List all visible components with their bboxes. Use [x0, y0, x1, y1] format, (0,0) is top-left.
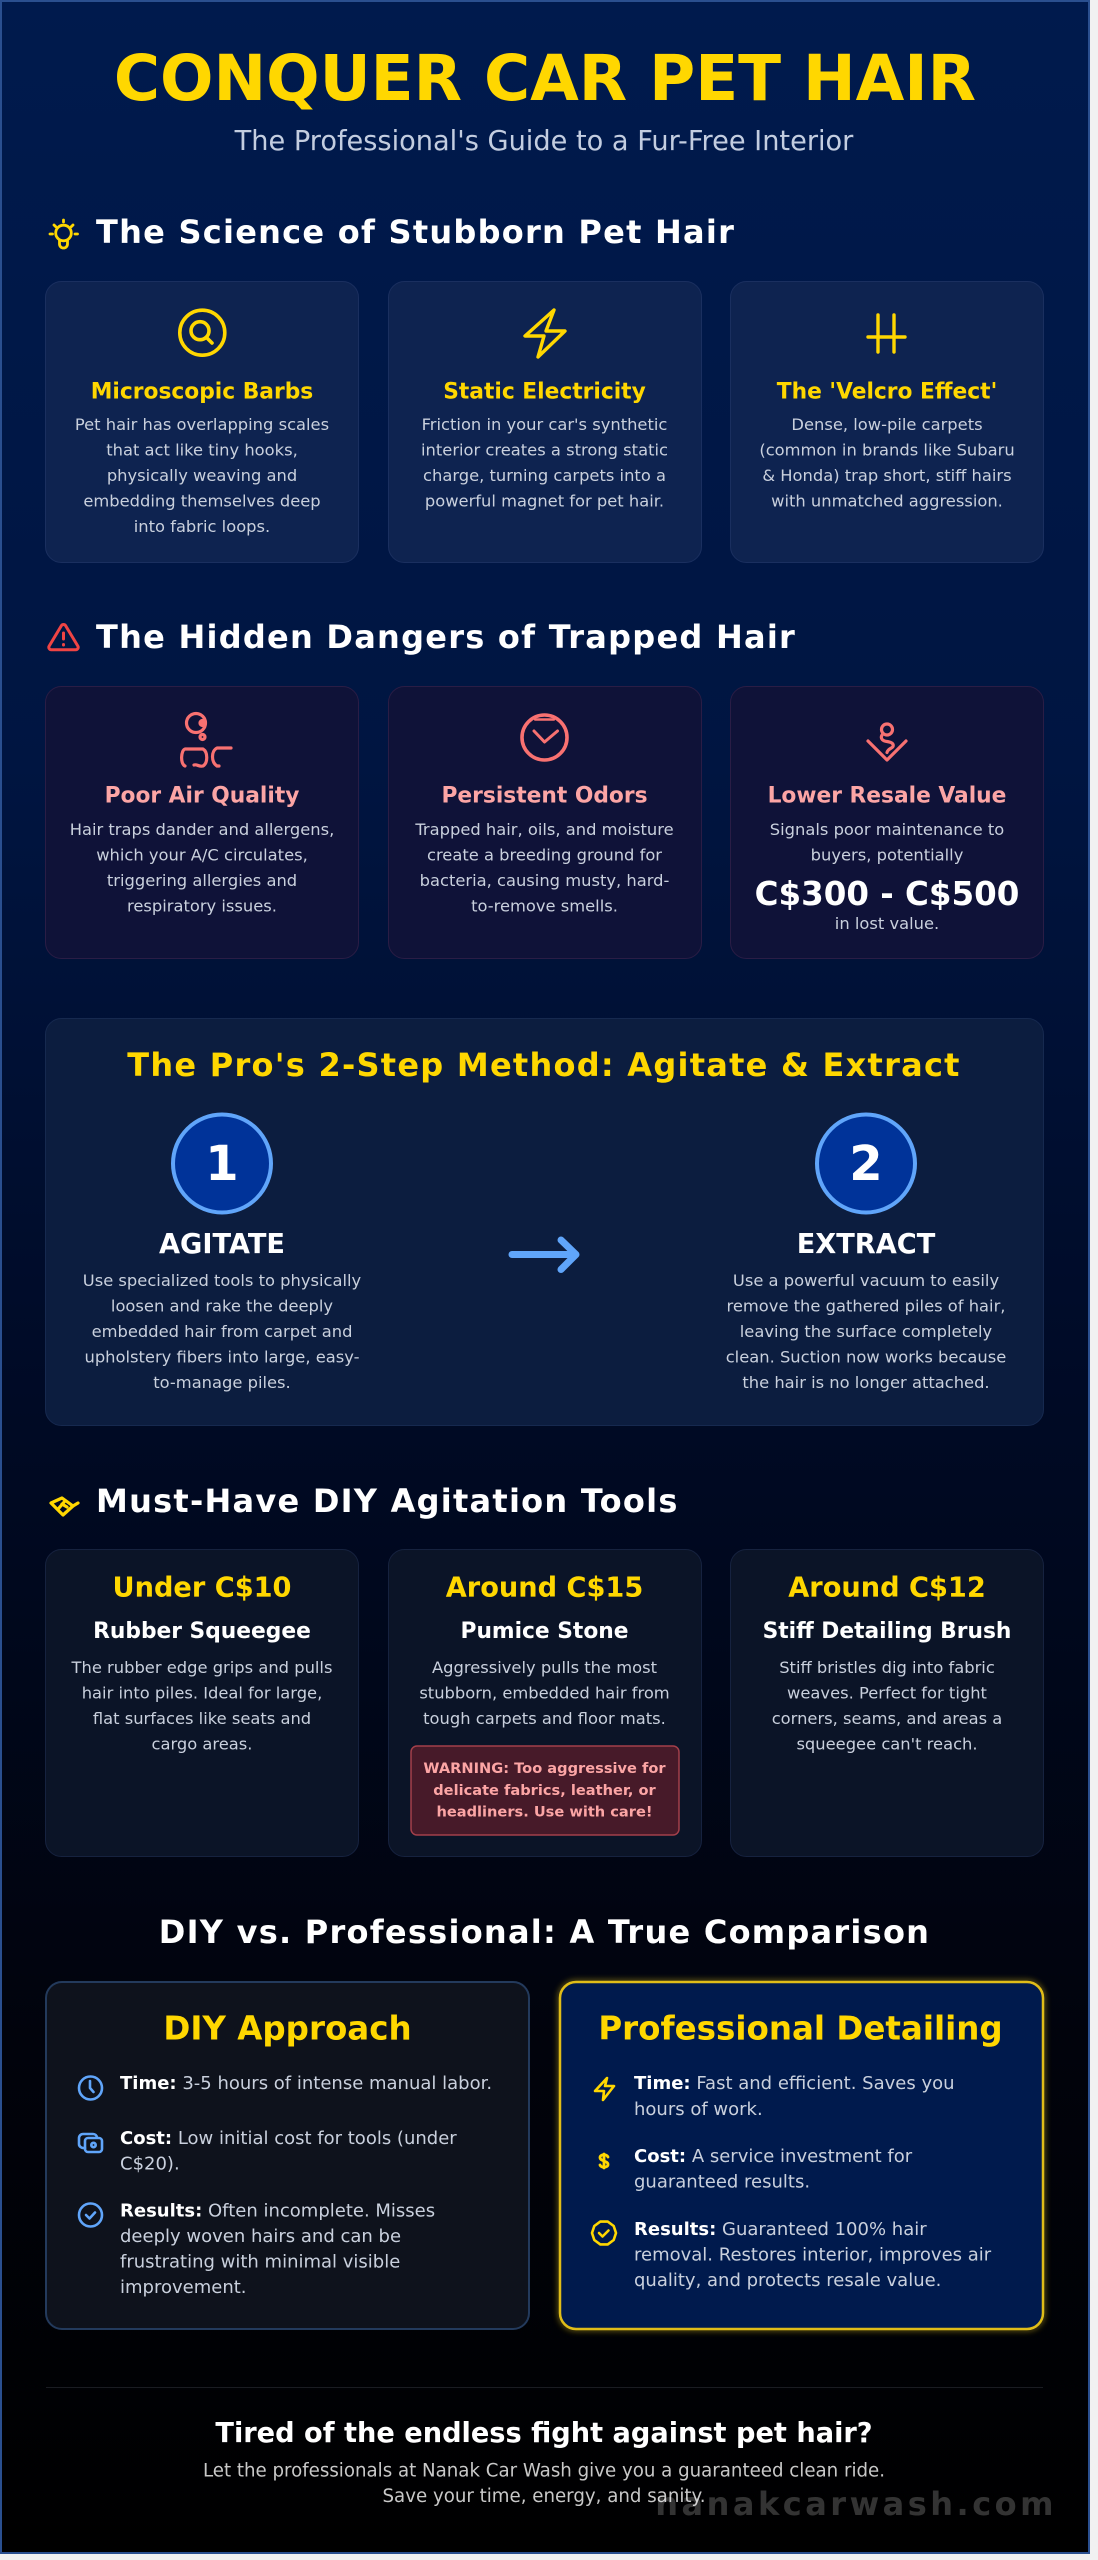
number circle [173, 1114, 271, 1212]
card: stiff detailing brush: squeegee can't reach. [796, 1734, 978, 1754]
card: poor air quality: triggering allergies and [107, 871, 297, 890]
card: microscopic barbs: Pet hair has overlapping scales [75, 415, 329, 434]
card: lower resale value: Signals poor maintenance to [770, 820, 1004, 839]
arrow [512, 1240, 576, 1270]
icon: value drop [868, 724, 906, 760]
step 2: clean. Suction now works because [726, 1348, 1006, 1366]
card: rubber squeegee [46, 1550, 358, 1856]
card: rubber squeegee: Rubber Squeegee [93, 1619, 311, 1644]
card: microscopic barbs [46, 282, 358, 562]
icon: odor [522, 715, 567, 760]
card: lower resale value: C$300 - C$500 [755, 875, 1019, 913]
section heading: dangers: The Hidden Dangers of Trapped Hair [96, 618, 796, 656]
icon: dollar [600, 2154, 608, 2168]
card: lower resale value [730, 686, 1044, 958]
footer heading: Tired of the endless fight against pet hair? [215, 2418, 873, 2449]
panel: danger cards [46, 686, 1044, 958]
step 1: to-manage piles. [153, 1373, 291, 1392]
panel: science cards [46, 282, 1044, 562]
card: pumice stone: Pumice Stone [460, 1619, 628, 1644]
card: velcro effect: Dense, low-pile carpets [791, 415, 983, 434]
card: persistent odors: create a breeding ground for [427, 846, 662, 864]
panel: 2-step method [46, 1018, 1044, 1426]
card: rubber squeegee: Under C$10 [113, 1572, 291, 1604]
card: persistent odors: Persistent Odors [441, 784, 648, 808]
panel: professional detailing: Time: Fast and efficient. Saves you [634, 2073, 955, 2094]
card: poor air quality: Hair traps dander and allergens, [70, 820, 334, 839]
card: static electricity [388, 282, 702, 562]
step 1: upholstery fibers into large, easy- [84, 1348, 360, 1366]
panel: DIY approach: frustrating with minimal visible [120, 2252, 400, 2272]
subtitle: The Professional's Guide to a Fur-Free Interior [234, 126, 854, 157]
card: velcro effect: & Honda) trap short, stiff hairs [762, 466, 1012, 485]
card: persistent odors: to-remove smells. [471, 896, 618, 916]
step 2: leaving the surface completely [740, 1322, 993, 1341]
card: microscopic barbs: embedding themselves deep [83, 492, 321, 510]
card: stiff detailing brush: Stiff Detailing Brush [763, 1619, 1011, 1644]
card: poor air quality: Poor Air Quality [105, 784, 299, 808]
card: pumice stone: Aggressively pulls the most [432, 1658, 657, 1677]
icon: air quality [182, 714, 231, 766]
card: poor air quality [46, 686, 358, 958]
card: microscopic barbs: that act like tiny hooks, [106, 440, 298, 460]
step 2: EXTRACT [797, 1229, 936, 1260]
panel: professional detailing: Professional Detailing [598, 2010, 1003, 2048]
card: stiff detailing brush: weaves. Perfect for tight [787, 1684, 987, 1702]
card: rubber squeegee: The rubber edge grips and pulls [71, 1658, 332, 1677]
card: persistent odors: bacteria, causing musty, hard- [420, 871, 669, 890]
card: persistent odors: Trapped hair, oils, and moisture [414, 820, 674, 839]
panel: DIY approach: C$20). [120, 2154, 180, 2174]
card: velcro effect: (common in brands like Subaru [759, 440, 1015, 460]
number circle: 2 [849, 1136, 883, 1192]
icon: tool [51, 1498, 78, 1515]
card: microscopic barbs: into fabric loops. [134, 517, 270, 536]
icon: lightning bolt [525, 310, 565, 357]
panel: DIY approach: deeply woven hairs and can be [120, 2226, 401, 2247]
panel: DIY approach: Cost: Low initial cost for tools (under [120, 2128, 457, 2149]
icon: bolt [595, 2078, 614, 2100]
card: static electricity: Static Electricity [443, 380, 646, 404]
warning callout: headliners. Use with care! [436, 1804, 653, 1820]
card: rubber squeegee: flat surfaces like seats and [93, 1709, 311, 1728]
card: static electricity: interior creates a strong static [421, 440, 668, 460]
card: lower resale value: buyers, potentially [811, 846, 964, 864]
icon: badge check [592, 2222, 616, 2244]
icon: clock [79, 2076, 102, 2100]
section heading: tools: Must-Have DIY Agitation Tools [96, 1482, 679, 1520]
panel: professional detailing [560, 1982, 1043, 2329]
watermark: nanakcarwash.com [655, 2485, 1057, 2523]
icon: magnifier [180, 310, 225, 355]
step 1: loosen and rake the deeply [111, 1296, 333, 1316]
panel: professional detailing: quality, and protects resale value. [634, 2270, 941, 2291]
step 2: the hair is no longer attached. [742, 1373, 990, 1392]
panel: DIY approach: DIY Approach [163, 2010, 412, 2048]
panel: professional detailing: removal. Restores interior, improves air [634, 2244, 992, 2266]
panel: DIY approach: improvement. [120, 2277, 247, 2298]
warning callout: delicate fabrics, leather, or [433, 1782, 657, 1799]
card: stiff detailing brush: Stiff bristles dig into fabric [779, 1658, 995, 1677]
footer text: Save your time, energy, and sanity. [383, 2486, 705, 2507]
card: poor air quality: respiratory issues. [127, 896, 277, 916]
card: microscopic barbs: physically weaving and [107, 466, 297, 485]
warning callout: WARNING: Too aggressive for [423, 1760, 666, 1777]
footer text [203, 2460, 885, 2507]
card: static electricity: charge, turning carpets into a [423, 466, 666, 485]
number circle: 1 [205, 1136, 239, 1192]
panel: professional detailing: guaranteed results. [634, 2172, 810, 2192]
step 2: Use a powerful vacuum to easily [733, 1271, 999, 1290]
panel: professional detailing: Results: Guaranteed 100% hair [634, 2219, 927, 2240]
step 1: embedded hair from carpet and [92, 1322, 352, 1341]
warning callout [411, 1746, 679, 1835]
panel: tool cards [46, 1550, 1044, 1856]
icon: light bulb [50, 220, 78, 248]
footer text: Let the professionals at Nanak Car Wash give you a guaranteed clean ride. [203, 2460, 885, 2482]
card: lower resale value: Lower Resale Value [768, 784, 1006, 808]
card: lower resale value: in lost value. [835, 914, 939, 933]
card: velcro effect [730, 282, 1044, 562]
icon: velcro hash [868, 315, 905, 352]
title: CONQUER CAR PET HAIR [114, 42, 976, 115]
step 1 [83, 1114, 362, 1392]
card: rubber squeegee: hair into piles. Ideal for large, [82, 1684, 322, 1702]
heading: The Pro's 2-Step Method: Agitate & Extract [127, 1046, 961, 1084]
step 1: AGITATE [159, 1229, 285, 1260]
comparison heading: DIY vs. Professional: A True Comparison [159, 1913, 930, 1951]
panel: professional detailing: hours of work. [634, 2099, 763, 2120]
panel: DIY approach [46, 1982, 529, 2329]
icon: check circle [79, 2204, 102, 2226]
card: pumice stone: stubborn, embedded hair from [419, 1684, 670, 1702]
card: microscopic barbs: Microscopic Barbs [91, 380, 313, 404]
icon: cash [79, 2134, 102, 2152]
step 2: remove the gathered piles of hair, [727, 1296, 1005, 1316]
card: pumice stone: Around C$15 [446, 1572, 643, 1604]
section heading: science: The Science of Stubborn Pet Hair [96, 213, 735, 251]
card: pumice stone [388, 1550, 702, 1856]
card: velcro effect: with unmatched aggression. [771, 492, 1003, 510]
card: stiff detailing brush: corners, seams, and areas a [772, 1709, 1002, 1728]
icon: warning triangle [49, 624, 78, 650]
panel: DIY approach: Time: 3-5 hours of intense manual labor. [120, 2073, 492, 2094]
card: poor air quality: which your A/C circulates, [96, 846, 308, 864]
card: velcro effect: The 'Velcro Effect' [777, 380, 997, 404]
number circle [817, 1114, 915, 1212]
card: pumice stone: tough carpets and floor mats. [423, 1709, 666, 1728]
card: persistent odors [388, 686, 702, 958]
panel: professional detailing: Cost: A service investment for [634, 2146, 913, 2167]
card: rubber squeegee: cargo areas. [152, 1734, 252, 1754]
card: stiff detailing brush: Around C$12 [788, 1572, 986, 1604]
card: stiff detailing brush [730, 1550, 1044, 1856]
card: static electricity: Friction in your car's synthetic [422, 415, 667, 434]
panel: DIY approach: Results: Often incomplete. Misses [120, 2200, 435, 2222]
step 2 [726, 1114, 1006, 1392]
step 1: Use specialized tools to physically [83, 1271, 362, 1290]
card: static electricity: powerful magnet for pet hair. [425, 492, 664, 510]
